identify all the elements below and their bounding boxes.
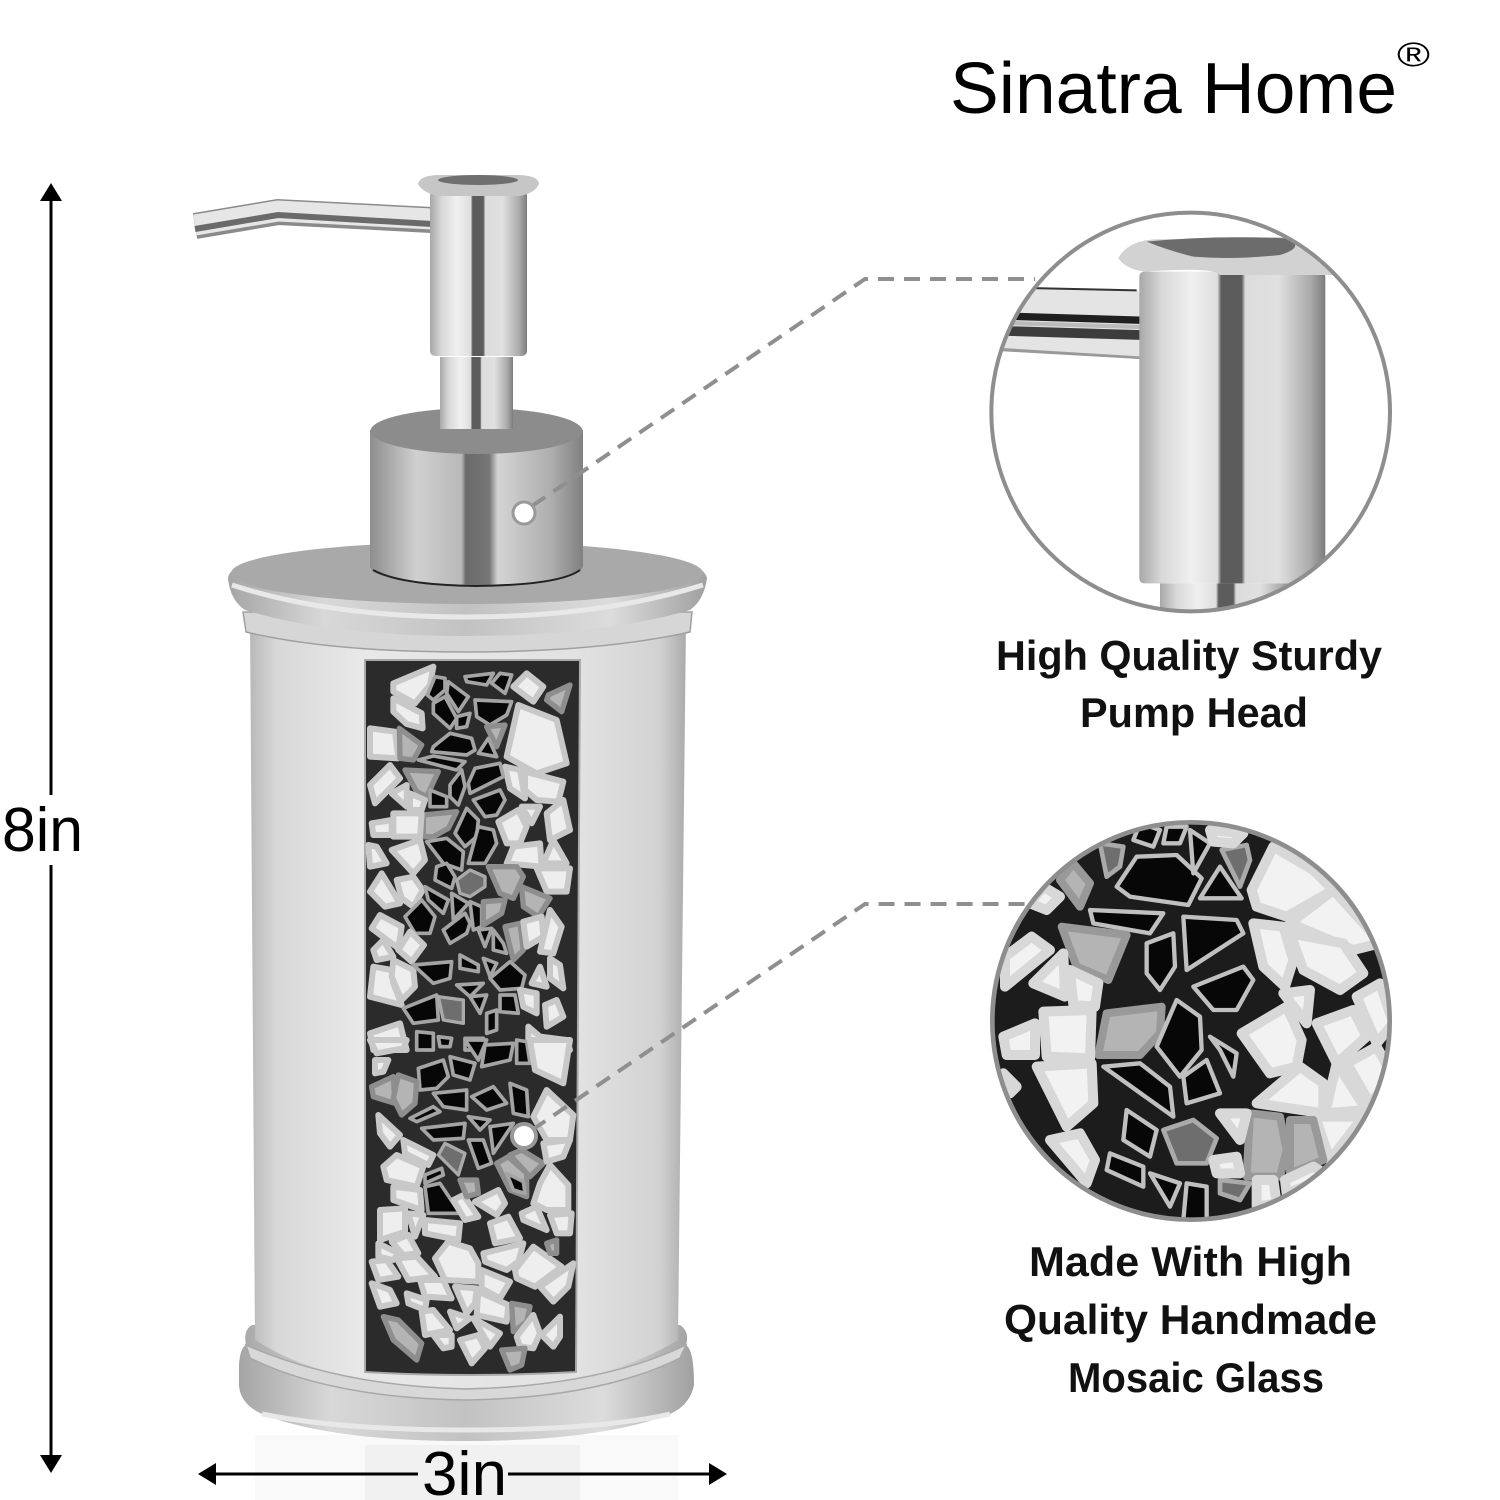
height dimension arrow: 8in xyxy=(2,183,83,1473)
enlarged stem xyxy=(1160,583,1288,610)
base ledge xyxy=(246,1345,686,1400)
label: mosaic glass: Made With High xyxy=(1029,1238,1352,1285)
mosaic glass panel xyxy=(365,660,580,1375)
mosaic shards upper xyxy=(368,667,570,1050)
dispenser reflection xyxy=(255,1435,678,1500)
dispenser base xyxy=(239,1325,694,1441)
enlarged cylinder xyxy=(1139,272,1325,583)
brand title: ® xyxy=(1397,36,1430,74)
label: mosaic glass xyxy=(1004,1238,1377,1401)
label: pump head: High Quality Sturdy xyxy=(996,632,1383,679)
pump collar xyxy=(370,408,583,586)
dispenser body xyxy=(250,620,686,1388)
enlarged cap xyxy=(1118,237,1333,275)
label: pump head: Pump Head xyxy=(1080,689,1308,736)
spout xyxy=(195,211,432,229)
label: mosaic glass: Quality Handmade xyxy=(1004,1296,1377,1343)
detail circle: pump head xyxy=(980,213,1390,617)
enlarged spout xyxy=(1003,287,1140,359)
brand title: Sinatra Home xyxy=(950,49,1397,129)
label: mosaic glass: Mosaic Glass xyxy=(1068,1354,1324,1401)
pump head xyxy=(195,175,539,356)
mosaic shards lower xyxy=(370,1040,573,1370)
detail circle: mosaic glass xyxy=(992,822,1393,1220)
height dimension arrow: 8in: 8in xyxy=(2,796,83,865)
soap dispenser product xyxy=(195,175,707,1441)
lid xyxy=(228,542,707,636)
callout leader: pump head xyxy=(513,279,1035,524)
width dimension arrow: 3in xyxy=(198,1440,727,1500)
neck rings xyxy=(243,612,692,652)
pump stem xyxy=(440,357,513,429)
label: pump head xyxy=(996,632,1383,736)
callout leader: mosaic glass xyxy=(512,904,1030,1148)
